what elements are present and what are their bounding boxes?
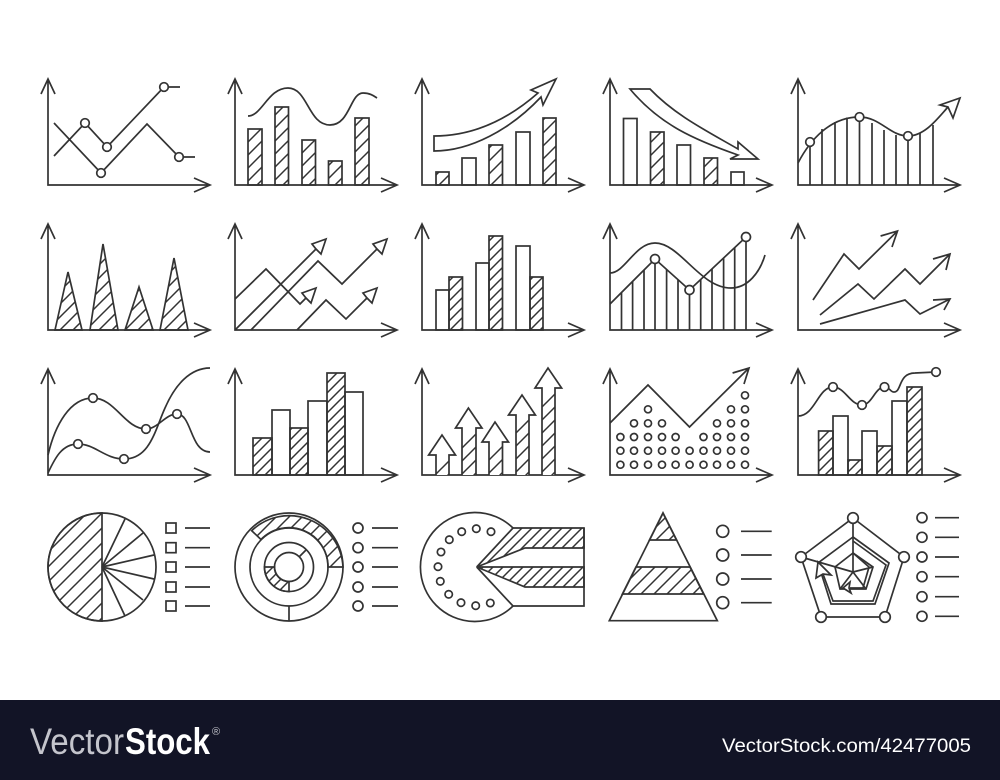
chart: pyramid with legend circles	[609, 513, 772, 621]
chart: grouped bars	[415, 224, 584, 337]
chart: rising bars with curved arrow	[415, 79, 584, 192]
chart: nested donut with legend circles	[235, 513, 398, 621]
chart: two line graphs with markers	[41, 79, 210, 192]
chart: line, curve and vertical lines	[603, 224, 772, 337]
chart: pie with legend squares	[48, 513, 210, 621]
chart: upward arrow bars	[415, 368, 584, 482]
radar arrows	[816, 541, 886, 601]
chart: area curve with vertical lines and arrow	[791, 79, 960, 192]
chart: adjacent histogram bars	[228, 369, 397, 482]
logo: ®	[212, 726, 220, 738]
chart: three rising lines with arrows	[791, 224, 960, 337]
chart: two curves with markers	[41, 368, 210, 482]
logo: Vector	[30, 721, 124, 762]
chart: four rising arrow lines	[228, 224, 397, 337]
legend: circles	[353, 523, 398, 611]
chart: bars with marker curve	[791, 368, 960, 482]
footer bar	[0, 700, 1000, 780]
legend: radar circles	[917, 513, 959, 621]
chart: falling bars with curved arrow	[603, 79, 772, 192]
logo	[30, 721, 220, 762]
image id: VectorStock.com/42477005	[722, 736, 971, 757]
chart: hatched bars with curve	[228, 79, 397, 192]
chart: pac-man circle with dots and bands	[420, 512, 584, 622]
legend: squares	[166, 523, 210, 611]
chart: radar pentagon with legend circles	[796, 513, 959, 622]
legend: pyramid circles	[717, 525, 772, 609]
chart: dot matrix with arrow line	[603, 368, 772, 482]
logo: Stock	[125, 721, 210, 762]
chart: hatched triangles	[41, 224, 210, 337]
